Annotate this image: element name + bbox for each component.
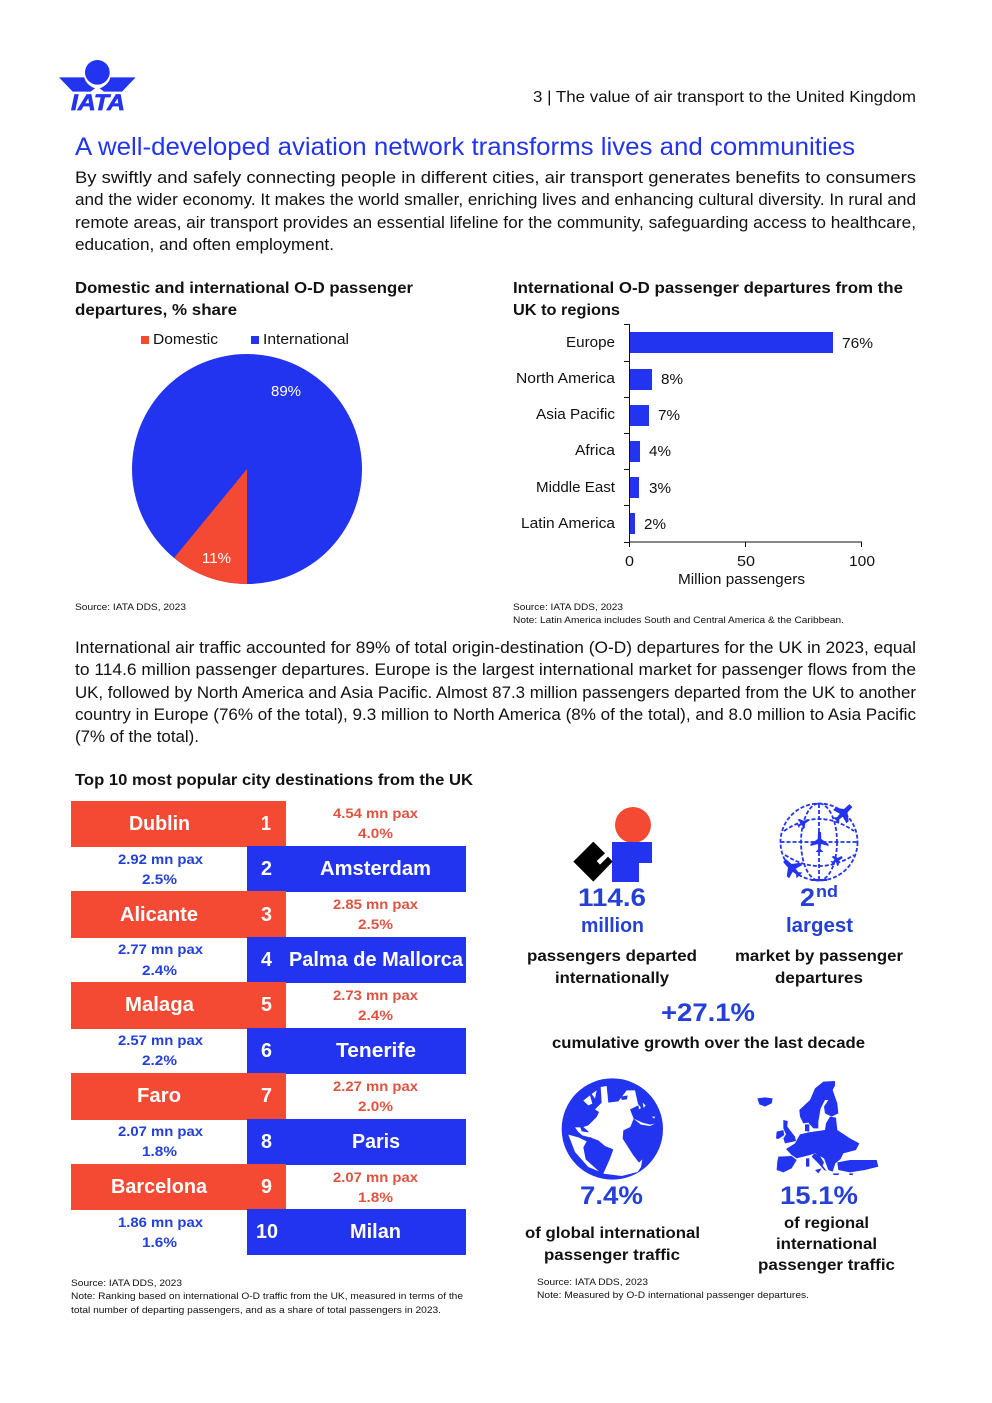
panel: 114.6 million stat: internationally — [555, 970, 669, 987]
analysis text block: (7% of the total). — [75, 728, 199, 746]
panel: global traffic stat: 7.4% — [580, 1182, 643, 1210]
row 3 Alicante: 2.85 mn pax — [333, 896, 418, 912]
row 10 Milan: 1.86 mn pax — [118, 1214, 203, 1230]
category labels: Asia Pacific — [536, 407, 615, 423]
legend: Domestic — [153, 332, 218, 348]
row 4 Palma de Mallorca: 4 — [261, 949, 273, 971]
analysis text block: to 114.6 million passenger departures. Europe is the largest international market for passenger flows from the — [75, 661, 916, 679]
panel: 2nd largest stat: market by passenger — [735, 948, 903, 965]
source and note: Source: IATA DDS, 2023 — [513, 602, 623, 613]
stats source and note: Note: Measured by O-D international passenger departures. — [537, 1290, 809, 1301]
row 4 Palma de Mallorca: 2.4% — [142, 962, 178, 978]
axes — [624, 324, 862, 547]
panel: top 10 city ranking — [71, 801, 466, 1255]
row 8 Paris: 8 — [261, 1131, 272, 1153]
row 4 Palma de Mallorca: 2.77 mn pax — [118, 941, 203, 957]
row 1 Dublin: 1 — [261, 813, 271, 835]
page header: 3 | The value of air transport to the United Kingdom — [533, 89, 916, 106]
panel: 114.6 million stat: million — [581, 915, 644, 937]
category labels: Middle East — [536, 480, 615, 496]
ordinal value: nd — [816, 882, 838, 901]
axis labels: Million passengers — [678, 572, 805, 588]
row 1 Dublin — [71, 801, 418, 847]
value labels: 7% — [658, 408, 680, 424]
source: Source: IATA DDS, 2023 — [75, 602, 186, 613]
panel: 114.6 million stat: passengers departed — [527, 948, 697, 965]
row 5 Malaga: 5 — [261, 994, 272, 1016]
heading: bar chart — [513, 280, 903, 319]
row 7 Faro: Faro — [137, 1085, 181, 1107]
row 8 Paris — [118, 1119, 466, 1165]
axis labels: 50 — [737, 554, 755, 570]
analysis text block: UK, followed by North America and Asia Pacific. Almost 87.3 million passengers departed from the UK to another — [75, 684, 917, 702]
panel: regional traffic stat: passenger traffic — [758, 1257, 895, 1274]
row 9 Barcelona: 1.8% — [358, 1189, 394, 1205]
row 7 Faro — [71, 1073, 418, 1120]
row 6 Tenerife: 6 — [261, 1040, 272, 1062]
row 7 Faro: 7 — [261, 1085, 272, 1107]
row 8 Paris: Paris — [352, 1131, 400, 1153]
source and note — [513, 602, 844, 626]
row 5 Malaga — [71, 982, 418, 1029]
icon: map of Europe — [757, 1081, 878, 1175]
row 2 Amsterdam: 2.92 mn pax — [118, 851, 203, 867]
pie: 89% — [271, 384, 301, 400]
icon: earth — [562, 1078, 663, 1180]
source and note: Note: Latin America includes South and Central America & the Caribbean. — [513, 615, 844, 626]
row 9 Barcelona: Barcelona — [111, 1176, 208, 1198]
icon: passengers — [573, 807, 652, 882]
row 4 Palma de Mallorca: Palma de Mallorca — [289, 949, 464, 971]
row 6 Tenerife — [118, 1028, 466, 1074]
panel: pie chart of domestic and international share — [75, 280, 413, 613]
value labels: 76% — [842, 336, 873, 352]
value labels: 3% — [649, 481, 671, 497]
row 3 Alicante: Alicante — [120, 904, 198, 926]
panel: regional traffic stat: of regional — [784, 1215, 869, 1232]
row 7 Faro: 2.0% — [358, 1098, 394, 1114]
axis labels: 100 — [849, 554, 875, 570]
panel: global traffic stat — [525, 1078, 700, 1264]
row 6 Tenerife: Tenerife — [336, 1040, 416, 1062]
legend: International — [263, 332, 349, 348]
row 5 Malaga: Malaga — [125, 994, 195, 1016]
category labels: Latin America — [521, 516, 616, 532]
ordinal value — [800, 882, 838, 912]
intro text block: By swiftly and safely connecting people in different cities, air transport generates benefits to consumers — [75, 169, 916, 187]
row 7 Faro: 2.27 mn pax — [333, 1078, 418, 1094]
panel: 2nd largest stat — [735, 799, 903, 987]
panel: global traffic stat: of global international — [525, 1225, 700, 1242]
row 2 Amsterdam: Amsterdam — [320, 858, 431, 880]
panel: regional traffic stat: international — [776, 1236, 877, 1253]
value labels: 4% — [649, 444, 671, 460]
row 1 Dublin: Dublin — [129, 813, 190, 835]
category labels: Europe — [566, 335, 615, 351]
heading: top 10 destinations: Top 10 most popular city destinations from the UK — [75, 772, 473, 789]
row 10 Milan: Milan — [350, 1221, 401, 1243]
panel: 2nd largest stat: departures — [775, 970, 863, 987]
title: A well-developed aviation network transforms lives and communities — [75, 133, 855, 161]
ordinal value: 2 — [800, 884, 815, 912]
row 10 Milan: 10 — [256, 1221, 278, 1243]
value labels: 8% — [661, 372, 683, 388]
stats source and note — [537, 1277, 809, 1301]
analysis text block — [75, 639, 917, 746]
row 9 Barcelona: 2.07 mn pax — [333, 1169, 418, 1185]
panel: 2nd largest stat: largest — [786, 915, 853, 937]
ranking source and note: Source: IATA DDS, 2023 — [71, 1278, 182, 1289]
panel: bar chart of regions — [513, 280, 903, 626]
panel: 114.6 million stat: 114.6 — [578, 884, 646, 912]
intro text block: remote areas, air transport provides an essential lifeline for the community, safeguarding access to healthcare, — [75, 214, 916, 232]
bars — [629, 332, 833, 534]
heading: pie chart: departures, % share — [75, 302, 237, 319]
panel: global traffic stat: passenger traffic — [544, 1247, 680, 1264]
analysis text block: International air traffic accounted for 89% of total origin-destination (O-D) departures for the UK in 2023, equal — [75, 639, 916, 657]
icon: globe with planes — [778, 799, 858, 882]
category labels — [516, 335, 616, 532]
row 1 Dublin: 4.54 mn pax — [333, 805, 418, 821]
row 8 Paris: 1.8% — [142, 1143, 178, 1159]
panel: cumulative growth stat — [552, 999, 865, 1052]
pie: 11% — [202, 551, 231, 567]
row 3 Alicante: 2.5% — [358, 916, 394, 932]
row 6 Tenerife: 2.57 mn pax — [118, 1032, 203, 1048]
heading: pie chart — [75, 280, 413, 319]
value labels: 2% — [644, 517, 666, 533]
value labels — [644, 336, 873, 533]
analysis text block: country in Europe (76% of the total), 9.3 million to North America (8% of the total), and 8.0 million to Asia Pacific — [75, 706, 916, 724]
heading: bar chart: UK to regions — [513, 302, 620, 319]
row 9 Barcelona — [71, 1164, 418, 1210]
row 4 Palma de Mallorca — [118, 937, 466, 983]
category labels: Africa — [575, 443, 616, 459]
axis labels — [625, 554, 875, 588]
stats source and note: Source: IATA DDS, 2023 — [537, 1277, 648, 1288]
row 6 Tenerife: 2.2% — [142, 1052, 178, 1068]
row 9 Barcelona: 9 — [261, 1176, 272, 1198]
row 2 Amsterdam — [118, 846, 466, 892]
row 3 Alicante — [71, 891, 418, 938]
pie — [132, 354, 362, 584]
row 10 Milan — [118, 1209, 466, 1255]
heading: pie chart: Domestic and international O-D passenger — [75, 280, 413, 297]
axis labels: 0 — [625, 554, 634, 570]
row 5 Malaga: 2.73 mn pax — [333, 987, 418, 1003]
panel: cumulative growth stat: cumulative growth over the last decade — [552, 1035, 865, 1052]
intro text block: education, and often employment. — [75, 236, 334, 254]
panel: 114.6 million stat — [527, 807, 697, 987]
intro text block: and the wider economy. It makes the world smaller, enriching lives and enhancing cultural diversity. In rural and — [75, 191, 916, 209]
ranking source and note: total number of departing passengers, and as a share of total passengers in 2023. — [71, 1305, 441, 1316]
icon: IATA logo: IATA — [71, 90, 125, 115]
row 5 Malaga: 2.4% — [358, 1007, 394, 1023]
icon: IATA logo — [59, 60, 136, 115]
row 2 Amsterdam: 2 — [261, 858, 272, 880]
ranking source and note: Note: Ranking based on international O-D traffic from the UK, measured in terms of the — [71, 1291, 463, 1302]
panel: cumulative growth stat: +27.1% — [661, 999, 755, 1027]
ranking source and note — [71, 1278, 463, 1316]
category labels: North America — [516, 371, 616, 387]
heading: bar chart: International O-D passenger departures from the — [513, 280, 903, 297]
row 3 Alicante: 3 — [261, 904, 272, 926]
row 10 Milan: 1.6% — [142, 1234, 178, 1250]
row 2 Amsterdam: 2.5% — [142, 871, 178, 887]
row 8 Paris: 2.07 mn pax — [118, 1123, 203, 1139]
panel: regional traffic stat: 15.1% — [780, 1182, 858, 1210]
panel: regional traffic stat — [757, 1081, 895, 1274]
legend — [141, 332, 349, 348]
intro text block — [75, 169, 916, 254]
icon: centre plane — [810, 832, 828, 852]
row 1 Dublin: 4.0% — [358, 825, 394, 841]
